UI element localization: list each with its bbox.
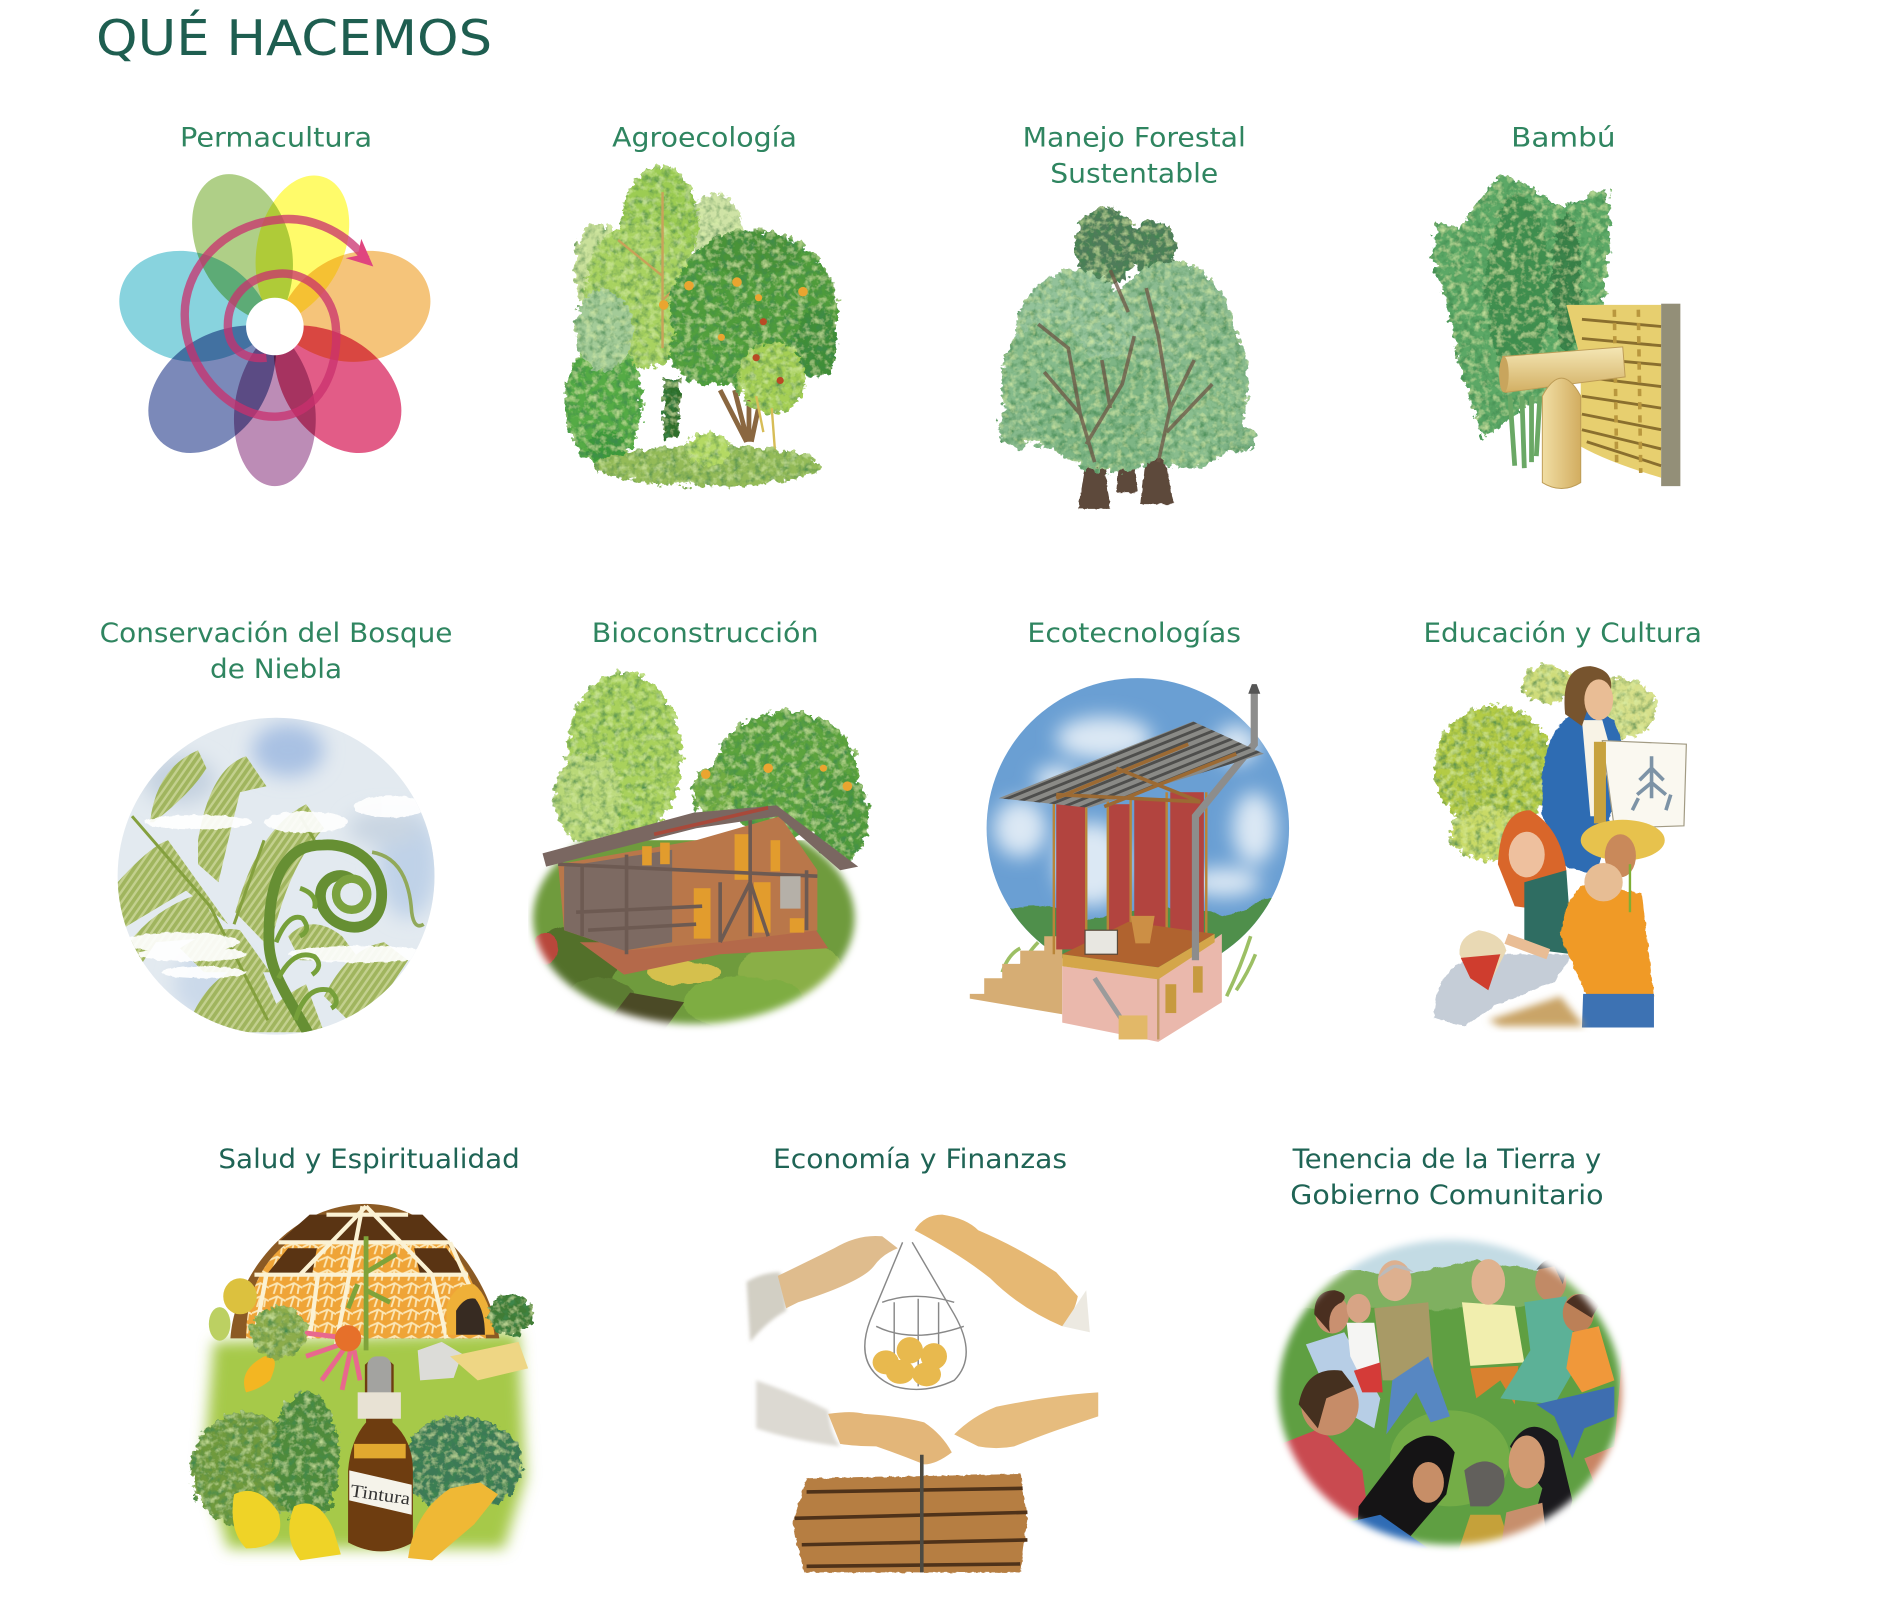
heading: Bioconstrucción: Bioconstrucción	[592, 618, 819, 649]
illustration: dome, tincture and medicinal plants	[191, 1204, 532, 1560]
heading: Tenencia de la Tierra y Gobierno Comunitario	[1290, 1144, 1604, 1211]
heading: Agroecología: Agroecología	[612, 122, 797, 153]
panel: Manejo Forestal Sustentable	[999, 122, 1255, 509]
panel: Ecotecnologías	[970, 618, 1296, 1042]
panel: Permacultura	[108, 122, 442, 486]
panel: Tenencia de la Tierra y Gobierno Comunitario	[1266, 1144, 1632, 1554]
heading: Manejo Forestal Sustentable: Manejo Forestal	[1023, 122, 1246, 153]
illustration: fern in mist	[114, 714, 438, 1038]
heading: Salud y Espiritualidad: Salud y Espiritualidad	[218, 1144, 520, 1175]
heading: Conservación del Bosque de Niebla: de Niebla	[210, 654, 342, 685]
panel: Salud y Espiritualidad	[191, 1144, 532, 1560]
heading: Educación y Cultura: Educación y Cultura	[1424, 618, 1702, 649]
panel: Bioconstrucción	[528, 618, 869, 1044]
illustration: food forest	[565, 167, 838, 486]
heading: Bambú: Bambú	[1511, 122, 1616, 153]
panel: Bambú	[1432, 122, 1680, 489]
illustration: forest trees	[999, 208, 1255, 509]
heading: Conservación del Bosque de Niebla	[100, 618, 452, 685]
heading: Tenencia de la Tierra y Gobierno Comunitario: Gobierno Comunitario	[1290, 1180, 1604, 1211]
bottle label: Tintura	[349, 1480, 412, 1509]
heading: Permacultura: Permacultura	[180, 122, 372, 153]
heading: Conservación del Bosque de Niebla: Conservación del Bosque	[100, 618, 452, 649]
panel: Agroecología	[565, 122, 838, 486]
illustration: teacher and children	[1434, 665, 1686, 1027]
illustration: hands exchanging goods	[747, 1215, 1098, 1572]
illustration: bamboo and woven panel	[1432, 174, 1680, 489]
title: QUÉ HACEMOS	[96, 8, 492, 67]
panel: Educación y Cultura	[1424, 618, 1702, 1027]
heading: Manejo Forestal Sustentable: Sustentable	[1050, 158, 1218, 189]
panel: Economía y Finanzas	[747, 1144, 1098, 1572]
illustration: dry toilet	[970, 672, 1296, 1042]
icon: permaculture flower	[108, 160, 442, 486]
heading: Ecotecnologías: Ecotecnologías	[1027, 618, 1241, 649]
heading: Manejo Forestal Sustentable	[1023, 122, 1246, 189]
panel: Conservación del Bosque de Niebla	[100, 618, 452, 1038]
heading: Tenencia de la Tierra y Gobierno Comunitario: Tenencia de la Tierra y	[1292, 1144, 1601, 1175]
illustration: eco house with garden	[528, 672, 869, 1044]
heading: Economía y Finanzas: Economía y Finanzas	[773, 1144, 1067, 1175]
illustration: community circle	[1266, 1230, 1632, 1554]
